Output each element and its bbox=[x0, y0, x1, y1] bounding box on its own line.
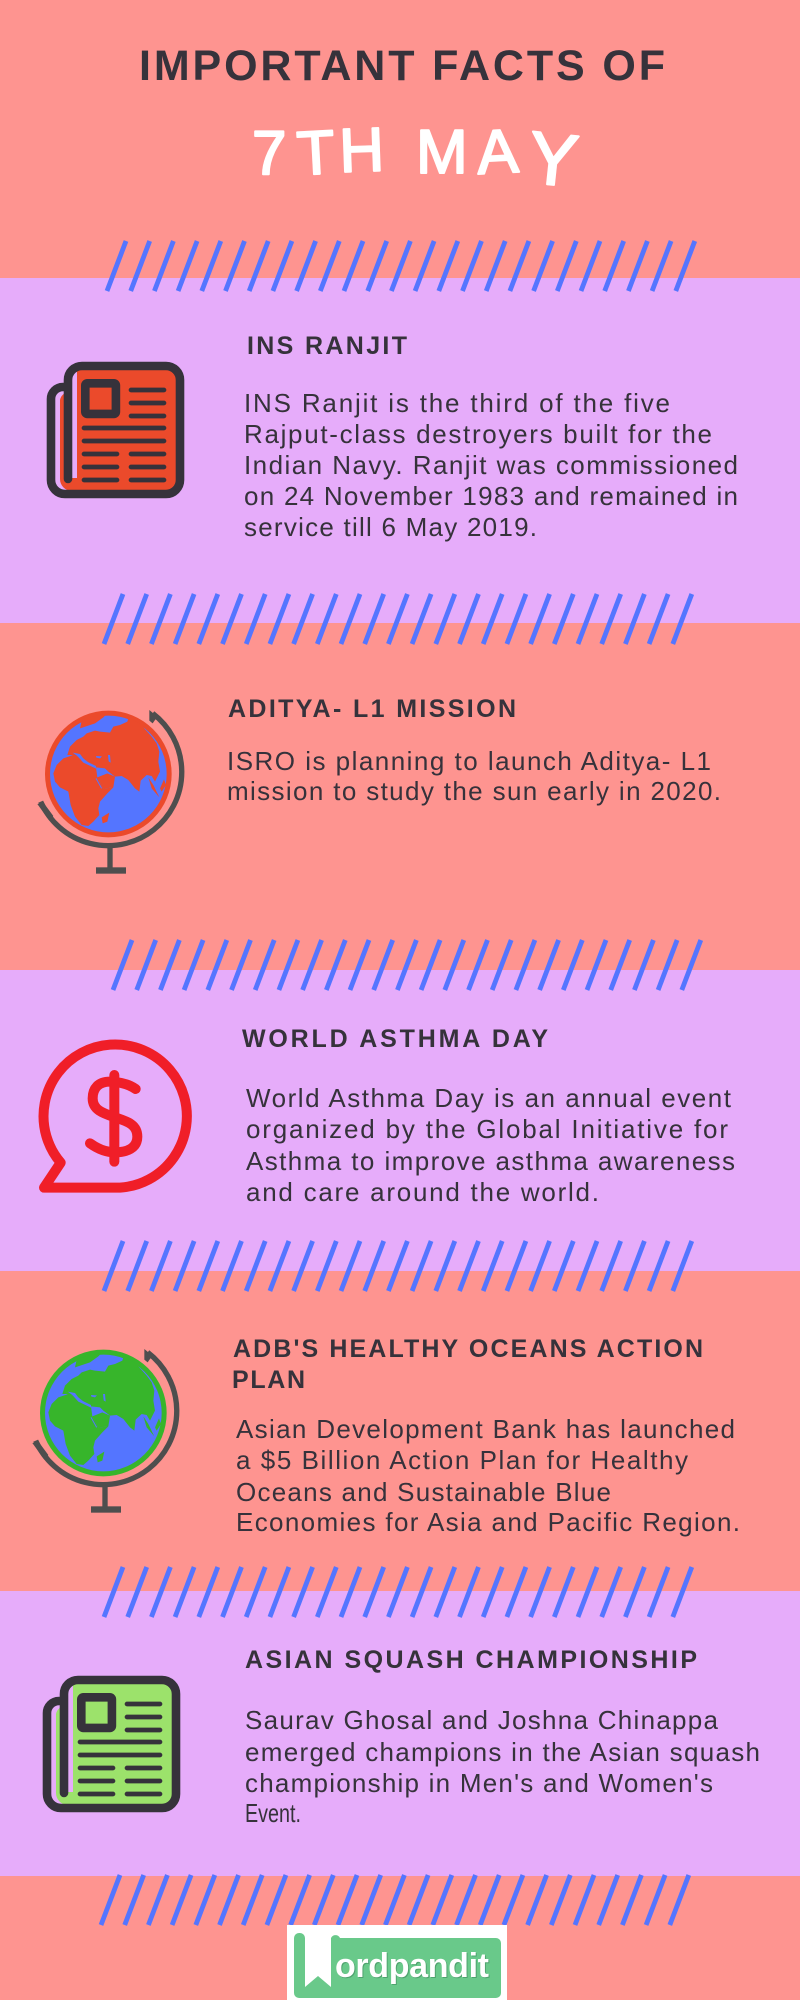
text: Asian Squash body bbox=[245, 1705, 760, 1828]
text: Aditya-L1 body: mission to study the sun early in 2020. bbox=[227, 776, 721, 806]
text: Asian Squash body: emerged champions in the Asian squash bbox=[245, 1737, 760, 1767]
text: Aditya-L1 body bbox=[227, 746, 721, 806]
heading: Aditya-L1 mission: ADITYA- L1 MISSION bbox=[228, 695, 516, 723]
text: World Asthma Day body: World Asthma Day is an annual event bbox=[246, 1083, 732, 1113]
text: Asian Squash body: championship in Men's and Women's bbox=[245, 1768, 713, 1798]
text: World Asthma Day body: Asthma to improve asthma awareness bbox=[246, 1146, 735, 1176]
icon: newspaper red bbox=[51, 366, 180, 494]
text: INS Ranjit body: INS Ranjit is the third of the five bbox=[244, 388, 670, 418]
text: World Asthma Day body: and care around the world. bbox=[246, 1177, 599, 1207]
subtitle: date: 7TH MAY bbox=[252, 115, 582, 203]
hatch strip 4 bbox=[104, 1241, 692, 1291]
title: IMPORTANT FACTS OF bbox=[139, 42, 665, 90]
text: ADB action plan body: Oceans and Sustainable Blue bbox=[236, 1477, 611, 1507]
text: World Asthma Day body bbox=[246, 1083, 735, 1207]
text: ADB action plan body: Economies for Asia and Pacific Region. bbox=[236, 1507, 740, 1537]
text: Asian Squash body: Event. bbox=[245, 1798, 301, 1828]
text: INS Ranjit body: on 24 November 1983 and remained in bbox=[244, 481, 738, 511]
text: ADB action plan body bbox=[236, 1414, 740, 1537]
panel: INS Ranjit background bbox=[0, 278, 800, 623]
icon: speech bubble with dollar bbox=[44, 1044, 187, 1188]
hatch strip 5 bbox=[104, 1567, 692, 1617]
logo: Wordpandit: ordpandit bbox=[335, 1947, 489, 1985]
heading: ADB's Healthy Oceans Action Plan: ADB'S HEALTHY OCEANS ACTION bbox=[233, 1335, 703, 1363]
logo: Wordpandit bbox=[287, 1925, 507, 2000]
heading: Asian Squash Championship: ASIAN SQUASH CHAMPIONSHIP bbox=[245, 1646, 697, 1674]
text: INS Ranjit body: Rajput-class destroyers built for the bbox=[244, 419, 712, 449]
hatch strip 3 bbox=[113, 940, 701, 990]
heading: ADB's Healthy Oceans Action Plan: PLAN bbox=[232, 1366, 305, 1394]
panel: Aditya-L1 background bbox=[0, 623, 800, 970]
hatch strip 2 bbox=[104, 594, 692, 644]
icon: globe green bbox=[32, 1349, 177, 1513]
panel: footer background bbox=[0, 1876, 800, 2000]
icon: newspaper green bbox=[47, 1680, 176, 1808]
text: Aditya-L1 body: ISRO is planning to launch Aditya- L1 bbox=[227, 746, 711, 776]
hatch strip 1 bbox=[107, 241, 695, 291]
heading: World Asthma Day: WORLD ASTHMA DAY bbox=[242, 1025, 548, 1053]
panel: header background bbox=[0, 0, 800, 278]
panel: Asian Squash background bbox=[0, 1591, 800, 1876]
icon: globe red bbox=[37, 710, 182, 874]
text: INS Ranjit body bbox=[244, 388, 738, 542]
text: Asian Squash body: Saurav Ghosal and Joshna Chinappa bbox=[245, 1705, 719, 1735]
heading: INS Ranjit: INS RANJIT bbox=[247, 332, 407, 360]
heading: ADB's Healthy Oceans Action Plan bbox=[232, 1335, 703, 1394]
text: ADB action plan body: Asian Development Bank has launched bbox=[236, 1414, 735, 1444]
text: INS Ranjit body: Indian Navy. Ranjit was commissioned bbox=[244, 450, 738, 480]
panel: World Asthma Day background bbox=[0, 970, 800, 1271]
text: ADB action plan body: a $5 Billion Action Plan for Healthy bbox=[236, 1445, 688, 1475]
hatch strip 6 bbox=[101, 1875, 689, 1925]
panel: ADB action plan background bbox=[0, 1271, 800, 1591]
text: INS Ranjit body: service till 6 May 2019. bbox=[244, 512, 537, 542]
text: World Asthma Day body: organized by the Global Initiative for bbox=[246, 1114, 728, 1144]
